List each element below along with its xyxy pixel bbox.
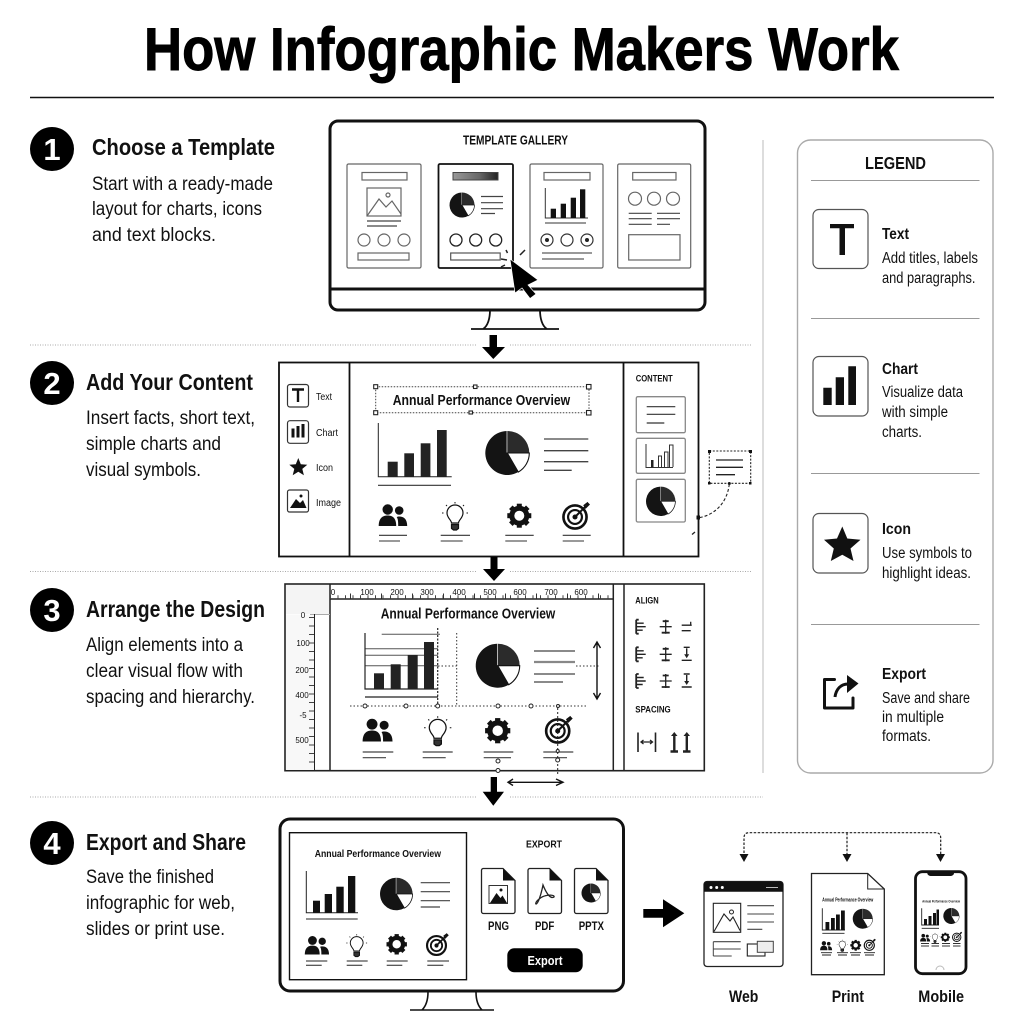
tool: image: Image	[316, 498, 341, 509]
left ruler: -5	[299, 711, 307, 720]
template card 2 selected	[438, 164, 513, 268]
step 4 description: Save the finished	[86, 867, 214, 888]
png file: PNG	[488, 919, 509, 933]
content sidebar: CONTENT	[636, 374, 673, 385]
legend item: export	[824, 666, 970, 745]
step 3 description: clear visual flow with	[86, 661, 243, 682]
gallery heading: TEMPLATE GALLERY	[463, 133, 568, 148]
step 2 editor panel	[279, 362, 698, 556]
top ruler: 400	[452, 588, 466, 597]
step 1 number badge	[30, 127, 74, 171]
step 3 description	[86, 635, 255, 708]
tool: text	[288, 384, 332, 407]
step 2 text	[30, 361, 255, 481]
pdf file	[528, 868, 562, 933]
arrow step 1 to 2	[482, 335, 505, 359]
output: print: Annual Performance Overview	[822, 898, 873, 904]
step 1 monitor: template gallery	[330, 121, 705, 329]
tool: chart	[288, 421, 338, 443]
top ruler: 0	[331, 588, 336, 597]
legend item: export: Save and share	[882, 690, 970, 707]
left ruler: 400	[295, 691, 309, 700]
template card 1	[347, 164, 421, 268]
align and spacing panel	[635, 596, 692, 752]
top ruler: 600	[574, 588, 588, 597]
step 3 text	[30, 588, 265, 708]
pie chart	[476, 644, 520, 688]
legend item: icon: highlight ideas.	[882, 565, 971, 582]
output labels: Web	[729, 987, 758, 1006]
top ruler: 200	[390, 588, 404, 597]
text lines	[544, 439, 588, 470]
legend item: text: and paragraphs.	[882, 270, 976, 287]
pptx file	[574, 868, 608, 933]
output labels	[729, 987, 964, 1006]
left ruler: 100	[296, 639, 310, 648]
left ruler: 200	[295, 666, 309, 675]
legend item: icon: Use symbols to	[882, 545, 972, 562]
output: mobile: Annual Performance Overview	[922, 898, 961, 904]
dragged content block	[696, 450, 752, 520]
step 3 heading: Arrange the Design	[86, 596, 265, 622]
icon row	[379, 502, 591, 541]
step 1 description	[92, 174, 273, 246]
align and spacing panel: ALIGN	[635, 596, 659, 606]
output: print	[812, 874, 884, 975]
icon row	[363, 708, 573, 775]
selected title box: Annual Performance Overview	[393, 393, 571, 409]
bar chart	[378, 423, 452, 485]
step 4 description: slides or print use.	[86, 919, 225, 940]
step 4 number badge	[30, 821, 74, 865]
step 2 description: simple charts and	[86, 434, 221, 455]
step 2 number badge	[30, 361, 74, 405]
export button: Export	[528, 954, 563, 968]
legend item: text	[813, 210, 978, 287]
legend item: text: Text	[882, 226, 910, 243]
left ruler: 500	[295, 736, 309, 745]
step 4 description: infographic for web,	[86, 893, 235, 914]
legend item: chart: charts.	[882, 424, 922, 441]
export heading: EXPORT	[526, 838, 562, 850]
content sidebar	[636, 374, 685, 522]
tool: chart: Chart	[316, 428, 338, 439]
left ruler	[295, 611, 330, 770]
arrow step 3 to 4	[483, 777, 504, 806]
step 3 description: spacing and hierarchy.	[86, 687, 255, 708]
top ruler: 700	[544, 588, 558, 597]
legend item: chart: Visualize data	[882, 384, 963, 401]
step 3 number badge: 3	[43, 593, 61, 628]
legend heading: LEGEND	[865, 153, 926, 173]
tool: icon: Icon	[316, 463, 333, 474]
step 2 heading: Add Your Content	[86, 369, 253, 395]
png file	[482, 868, 515, 933]
tool: image	[288, 490, 341, 512]
step 4 monitor: export	[280, 819, 624, 1010]
title: How Infographic Makers Work	[144, 16, 900, 83]
legend item: chart	[813, 356, 963, 441]
step 3 description: Align elements into a	[86, 635, 243, 656]
panel: legend	[798, 140, 993, 773]
step 1 text	[30, 127, 275, 246]
left ruler: 0	[301, 611, 306, 620]
output: web	[704, 882, 783, 966]
finished document	[290, 833, 466, 980]
step 1 number badge: 1	[43, 132, 61, 167]
step 2 description: Insert facts, short text,	[86, 408, 255, 429]
spacing arrow	[594, 642, 600, 699]
legend item: chart: with simple	[881, 404, 948, 421]
text lines	[534, 651, 575, 682]
step 4 heading: Export and Share	[86, 829, 246, 855]
legend item: text: Add titles, labels	[882, 250, 978, 267]
pdf file: PDF	[535, 919, 554, 933]
finished document: Annual Performance Overview	[315, 848, 442, 860]
step 2 description	[86, 408, 255, 481]
top ruler: 300	[420, 588, 434, 597]
step 1 description: and text blocks.	[92, 225, 216, 246]
output labels: Mobile	[918, 987, 964, 1006]
cursor click	[501, 250, 538, 298]
template card 3	[530, 164, 603, 268]
pie chart	[485, 431, 529, 475]
step 1 description: Start with a ready-made	[92, 174, 273, 195]
legend item: icon	[813, 514, 972, 582]
step 4 number badge: 4	[43, 826, 61, 861]
step 3 number badge	[30, 588, 74, 632]
design heading: Annual Performance Overview	[381, 606, 556, 622]
top ruler: 500	[483, 588, 497, 597]
drag mark	[692, 532, 695, 534]
export button	[507, 948, 583, 972]
align and spacing panel: SPACING	[635, 704, 671, 716]
top ruler	[330, 588, 613, 597]
output labels: Print	[832, 987, 864, 1006]
tool: text: Text	[316, 392, 332, 403]
step 4 description	[86, 867, 235, 940]
legend item: icon: Icon	[882, 521, 911, 538]
legend item: chart: Chart	[882, 361, 919, 378]
tool: icon	[289, 458, 333, 475]
dashed distribution arrows	[740, 833, 945, 862]
legend item: export: Export	[882, 666, 927, 683]
step 1 description: layout for charts, icons	[92, 199, 262, 220]
arrow to outputs	[643, 899, 684, 927]
step 1 heading: Choose a Template	[92, 134, 275, 160]
top ruler: 600	[513, 588, 527, 597]
legend item: export: in multiple	[882, 709, 944, 726]
selected title box	[374, 384, 591, 415]
output: mobile	[916, 872, 966, 974]
template card 4	[618, 164, 691, 268]
top ruler: 100	[360, 588, 374, 597]
step 4 text	[30, 821, 246, 940]
step 2 description: visual symbols.	[86, 460, 201, 481]
arrow step 2 to 3	[483, 557, 505, 581]
pptx file: PPTX	[579, 919, 604, 933]
legend item: export: formats.	[882, 728, 931, 745]
guides and chart	[350, 628, 600, 708]
step 3 layout editor	[285, 584, 704, 775]
step 2 number badge: 2	[43, 366, 61, 401]
small horizontal spacing arrow	[508, 779, 563, 786]
